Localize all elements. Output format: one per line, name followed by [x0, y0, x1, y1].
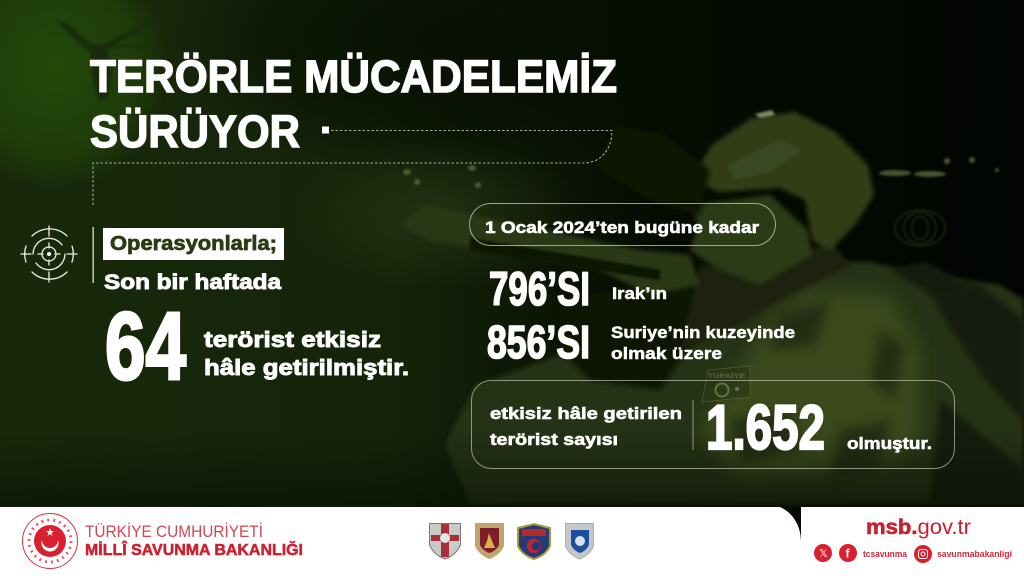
ministry name: [85, 522, 303, 559]
lower body: [445, 262, 1024, 504]
helmet glint: [755, 110, 775, 118]
date pill: [470, 204, 776, 246]
neck: [680, 240, 850, 350]
total panel: terörist sayısı: [490, 430, 618, 449]
camo patches: [730, 300, 905, 480]
helmet rail: [728, 140, 802, 180]
stat: northern Syria: [487, 316, 795, 368]
handle: tcsavunma: tcsavunma: [863, 549, 908, 560]
soldier silhouette: [0, 110, 1024, 510]
icon: X: 𝕏: [819, 548, 828, 560]
Turkish flag patch: [702, 366, 750, 402]
title: SÜRÜYOR: [90, 106, 300, 157]
stat: northern Syria: Suriye’nin kuzeyinde: [611, 323, 795, 342]
stat: northern Syria: olmak üzere: [611, 344, 722, 363]
ministry name: TÜRKİYE CUMHURİYETİ: [85, 522, 263, 541]
Turkish flag patch: TÜRKİYE: [708, 371, 746, 380]
icon: Facebook: [839, 544, 857, 562]
emblem: gendarmerie shield: [475, 523, 504, 559]
text: neutralised terrorists: hâle getirilmiştir.: [204, 355, 409, 380]
left panel: weekly figure: [92, 227, 409, 400]
shoulder highlight: [700, 290, 920, 480]
icon: target crosshair: [21, 226, 77, 282]
footer: [0, 507, 1024, 576]
icon: X: [814, 544, 832, 562]
label: Operasyonlarla: [103, 228, 284, 260]
text: neutralised terrorists: terörist etkisiz: [204, 327, 381, 352]
emblem: land forces shield: [430, 524, 460, 559]
number: 1.652: 1.652: [706, 393, 825, 463]
tracer lights: [403, 157, 999, 188]
total panel: [472, 380, 954, 468]
total panel: olmuştur.: [847, 434, 932, 453]
emblem: coast guard shield: [566, 524, 594, 559]
handle: savunmabakanligi: savunmabakanligi: [937, 549, 1012, 560]
backpack strap: [925, 280, 1024, 420]
text: neutralised terrorists: [204, 327, 409, 380]
emblem: naval shield: [518, 524, 550, 559]
icon: Facebook: f: [846, 546, 850, 560]
title: TERÖRLE MÜCADELEMİZ: [90, 51, 617, 102]
label: Operasyonlarla: Operasyonlarla;: [110, 233, 277, 255]
text: Son bir haftada: Son bir haftada: [104, 271, 281, 294]
website: msb.gov.tr: [866, 516, 971, 539]
stat: Iraq: Irak’ın: [612, 285, 667, 303]
date pill: 1 Ocak 2024’ten bugüne kadar: [485, 218, 759, 237]
icon: Instagram: [914, 545, 932, 563]
helmet: [690, 112, 874, 250]
title: [90, 51, 617, 157]
rifle: [400, 205, 700, 295]
title dotted frame: [93, 126, 612, 205]
rifle shade: [470, 238, 660, 280]
number: 64: 64: [105, 293, 186, 400]
fade into footer: [0, 430, 1024, 510]
total panel: etkisiz hâle getirilen: [490, 404, 682, 423]
stat: Iraq: 796’SI: [489, 262, 590, 315]
logo: ministry emblem: [22, 514, 78, 568]
stat: northern Syria: 856’SI: [487, 316, 590, 368]
night vision mount: [595, 125, 710, 215]
forearm shadow: [560, 275, 730, 390]
ministry name: MİLLÎ SAVUNMA BAKANLIĞI: [85, 540, 303, 559]
face: [690, 195, 812, 285]
helicopter silhouette: [57, 20, 145, 100]
radar rings: [895, 210, 945, 246]
